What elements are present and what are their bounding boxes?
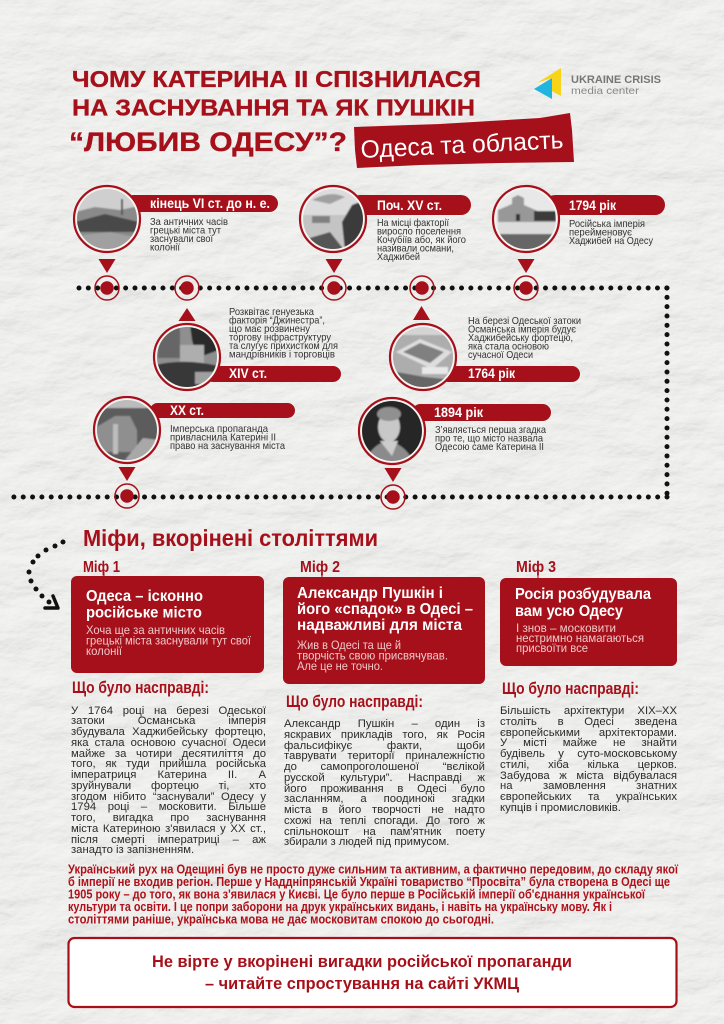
myth 3 reality text: Більшість архітектури XIX–XX [500, 705, 677, 717]
myth 1 reality text: того, як туди прийшла російська [71, 758, 266, 770]
myth label: Міф 3 [516, 559, 556, 576]
description: Османська імперія будує [468, 324, 576, 336]
myth 3 reality text: на замовлення знатних [500, 780, 677, 792]
myth label: Міф 1 [83, 559, 120, 576]
date pill [545, 195, 665, 215]
myth card: нестримно намагаються [516, 632, 644, 645]
myth card: творчість свою присвячував. [297, 650, 448, 662]
description: сучасної Одеси [468, 350, 533, 361]
reality heading: Що було насправді: [286, 693, 423, 711]
myth 2 reality text: до самопроголошеної “вєлікой [284, 761, 485, 773]
event: 1764 рік [390, 315, 581, 390]
myth 1 reality text: того, вигадка про заснування [71, 812, 266, 824]
myth 1 reality text: яка стала основою сучасної Одеси [71, 737, 266, 749]
description: На місці факторії [377, 217, 449, 229]
description: перейменовує [569, 228, 632, 238]
closing paragraph [68, 862, 678, 926]
photo: Odessa building [493, 186, 559, 252]
photo: Khadjibey fortress [390, 324, 456, 390]
myth 2 reality text: схожі на теплі спогади. До того ж [284, 815, 485, 827]
description: яка стала основою [468, 342, 549, 352]
description [170, 424, 285, 452]
description: Кочубіїв або, як його [377, 234, 466, 246]
date label: Поч. XV ст. [377, 197, 442, 213]
photo: ancient coast [74, 186, 140, 252]
myth 1 reality text: зруйнували фортецю ті, хто [71, 780, 266, 792]
description: виросло поселення [377, 226, 461, 238]
description: Хаджибей на Одесу [569, 235, 654, 247]
description: та слугує прихистком для [229, 341, 338, 352]
myth 1 reality text [71, 704, 266, 856]
description: Розквітає генуезька [229, 307, 314, 318]
myth card: Але це не точно. [297, 660, 383, 673]
event: 1894 рік [359, 398, 551, 464]
myth 1 reality text: імператриця Катерина ІІ. А [71, 769, 266, 781]
timeline markers [95, 276, 538, 509]
description: Російська імперія [569, 219, 645, 230]
logo: Ukraine Crisis Media Center [534, 68, 661, 99]
myth 2 reality text: засланням, а поодинокі згадки [284, 793, 485, 805]
date label: 1794 рік [569, 197, 617, 213]
region label: Одеса та область [354, 113, 574, 168]
description: грецькі міста тут [150, 226, 221, 236]
description [468, 315, 581, 361]
myth 3 reality text: європейських та українських [500, 791, 677, 803]
date label: 1894 рік [434, 404, 484, 420]
section heading: Міфи, вкорінені століттями [83, 525, 378, 551]
event: Поч. XV ст. [300, 186, 471, 263]
panel: myth 2 [283, 559, 485, 711]
region label: Одеса та область: Одеса та область [360, 126, 564, 164]
logo: Ukraine Crisis Media Center: media center [571, 85, 640, 97]
call to action box [68, 938, 676, 1007]
description: називали османи, [377, 244, 454, 254]
myth 1 reality text: У 1764 році на березі Одеської [71, 704, 266, 716]
date pill [125, 195, 278, 212]
date pill [350, 195, 471, 215]
myth 2 reality text: таврувати території приналежністю [284, 750, 485, 762]
myth card: І знов – московити [516, 622, 616, 635]
closing paragraph: культури та освіти. І це попри заборони на друк українських видань, і навіть на українську мову. Як і [68, 900, 612, 914]
event: XX ст. [94, 397, 295, 463]
myth 3 reality text: століть в Одесі зведена [500, 716, 677, 728]
event: 1794 рік [493, 186, 665, 252]
description: Хаджибей [377, 251, 420, 263]
myth 3 reality text: європейськими архітекторами. [500, 726, 677, 738]
call to action box: – читайте спростування на сайті УКМЦ [205, 974, 520, 993]
photo: city view [94, 397, 160, 463]
myth card: колонії [86, 645, 123, 658]
title: ЧОМУ КАТЕРИНА ІІ СПІЗНИЛАСЯ [72, 66, 481, 92]
myth 2 reality text: яскравих прикладів того, як Росія [284, 729, 485, 741]
date pill [440, 366, 580, 382]
myth 1 reality text: згодом нібито “заснували” Одесу у [71, 790, 266, 802]
description: привласнила Катерині ІІ [170, 432, 276, 444]
description: мандрівників і торговців [229, 350, 335, 360]
date label: XIV ст. [229, 365, 267, 381]
myth card: Росія розбудувала [515, 586, 651, 603]
myth card: Одеса – ісконно [86, 588, 203, 605]
myth card [283, 577, 485, 684]
myth 2 reality text: його проживання в Одесі було [284, 782, 485, 794]
description: заснували свої [150, 234, 213, 245]
description: факторія “Джинестра”, [229, 314, 325, 326]
myth 1 reality text: затоки Османська імперія [71, 715, 266, 727]
myth card: Хоча ще за античних часів [86, 624, 225, 637]
myth card: його «спадок» в Одесі – [297, 601, 473, 618]
myth 1 reality text: збудувала Хаджибейську фортецю, [71, 726, 266, 738]
myth 2 reality text: спільнокошт на пам'ятник поету [284, 826, 485, 838]
myth card: Александр Пушкін і [297, 585, 443, 602]
description: За античних часів [150, 217, 228, 228]
title: “ЛЮБИВ ОДЕСУ”? [69, 127, 347, 157]
timeline arrows [98, 259, 534, 482]
reality heading: Що було насправді: [72, 679, 209, 697]
description: З’являється перша згадка [435, 425, 546, 436]
event: кінець VI ст. до н. е. [74, 186, 278, 254]
date label: XX ст. [170, 402, 204, 418]
date label: 1764 рік [468, 365, 516, 381]
description: Хаджибейську фортецю, [468, 332, 573, 344]
myth 3 reality text: У місті майже не знайти [500, 737, 677, 749]
myth card: вам усю Одесу [515, 603, 623, 620]
myth label: Міф 2 [300, 559, 340, 576]
panel: myth 1 [71, 559, 264, 697]
myth 3 reality text: стилі, хіба кілька церков. [500, 759, 677, 771]
photo: settlement by the sea [300, 186, 366, 252]
description: про те, що місто назвала [435, 434, 543, 444]
description: право на заснування міста [170, 441, 285, 452]
myth 1 reality text: після смерті імператриці – аж [71, 834, 266, 846]
closing paragraph: століттями раніше, українська мова не дає московитам спокою до сьогодні. [68, 912, 494, 926]
description [377, 217, 466, 263]
description [569, 219, 654, 247]
date pill [412, 404, 551, 421]
description [150, 217, 228, 254]
myth card: російське місто [86, 604, 202, 622]
myth 1 reality text: майже за чотири десятиліття до [71, 748, 266, 760]
title [69, 66, 481, 157]
myth 1 reality text: 1794 році – московити. Більше [71, 801, 266, 813]
title: НА ЗАСНУВАННЯ ТА ЯК ПУШКІН [72, 94, 475, 120]
call to action box: Не вірте у вкорінені вигадки російської пропаганди [152, 952, 572, 971]
description [435, 425, 546, 453]
myth 2 reality text: Александр Пушкін – один із [284, 718, 485, 730]
description: Імперська пропаганда [170, 424, 268, 435]
myth 3 reality text [500, 705, 678, 814]
description: Одесою саме Катерина ІІ [435, 442, 544, 453]
myth card [500, 578, 677, 666]
dotted arrow [26, 540, 66, 608]
myth 2 reality text: міста в його творчості не надто [284, 804, 485, 816]
event: XIV ст. [154, 307, 341, 390]
description: торгову інфраструктуру [229, 332, 332, 344]
date label: кінець VI ст. до н. е. [150, 196, 270, 211]
panel: myth 3 [500, 559, 677, 698]
date pill [150, 403, 295, 418]
description: що має розвинену [229, 324, 311, 335]
myth card: надважливі для міста [297, 617, 462, 634]
reality heading: Що було насправді: [502, 680, 639, 698]
myth 2 reality text: збирали з людей під примусом. [284, 836, 449, 848]
closing paragraph: 1905 року – до того, як вона з'явилася у Києві. Це було перше в Російській імперії об'єднання української [68, 888, 645, 902]
description [229, 307, 338, 360]
myth 1 reality text: міста Катериною з'явилася у ХХ ст., [71, 823, 266, 835]
myth card: грецькі міста заснували тут свої [86, 634, 252, 648]
myth card: присвоїти все [516, 642, 588, 655]
description: На березі Одеської затоки [468, 315, 581, 327]
logo: Ukraine Crisis Media Center: UKRAINE CRISIS [571, 74, 661, 86]
date pill [205, 366, 341, 382]
myth 3 reality text: Забудова ж міста відбувалася [500, 770, 677, 782]
myth 3 reality text: будівель у суто-московському [500, 748, 677, 760]
myth card [71, 576, 264, 673]
myth 2 reality text: русской культури”. Насправді ж [284, 772, 485, 784]
timeline dotted path [13, 288, 667, 497]
photo: Genoese trading post [154, 324, 220, 390]
description: колонії [150, 242, 180, 254]
photo: portrait of Catherine II [359, 398, 425, 464]
myth 1 reality text: занадто із запізненням. [71, 844, 194, 856]
myth card: Жив в Одесі та ще й [297, 639, 401, 652]
myth 3 reality text: купців і промисловиків. [500, 802, 621, 814]
myth 2 reality text [284, 718, 485, 848]
myth 2 reality text: фальсифікує факти, щоби [284, 740, 485, 752]
